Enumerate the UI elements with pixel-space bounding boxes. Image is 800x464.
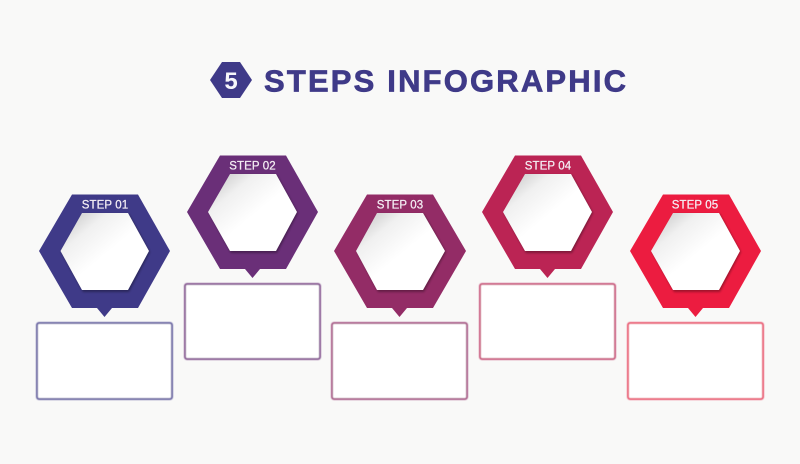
text box: [628, 323, 763, 399]
panel: step 01: [37, 194, 172, 399]
text box: [37, 323, 172, 399]
step label: STEP 02: [229, 160, 276, 172]
step label: STEP 05: [672, 200, 718, 212]
panel: step 04: [480, 156, 615, 359]
panel: step 02: [185, 156, 320, 359]
text box: [332, 323, 467, 399]
step label: STEP 03: [377, 200, 423, 212]
icon: hexagon with number 5: 5: [224, 68, 238, 95]
panel: step 05: [628, 194, 763, 399]
text box: [185, 284, 320, 359]
hexagon badge: [334, 194, 466, 317]
panel: step 03: [332, 194, 467, 399]
text box: [480, 284, 615, 359]
title: [210, 62, 626, 98]
hexagon badge: [187, 156, 318, 278]
step label: STEP 01: [82, 200, 128, 212]
hexagon badge: [482, 156, 613, 278]
heading text: STEPS INFOGRAPHIC: [264, 64, 626, 98]
step label: STEP 04: [525, 160, 572, 172]
icon: hexagon with number 5: [210, 62, 252, 98]
hexagon badge: [39, 194, 170, 317]
hexagon badge: [630, 194, 761, 317]
